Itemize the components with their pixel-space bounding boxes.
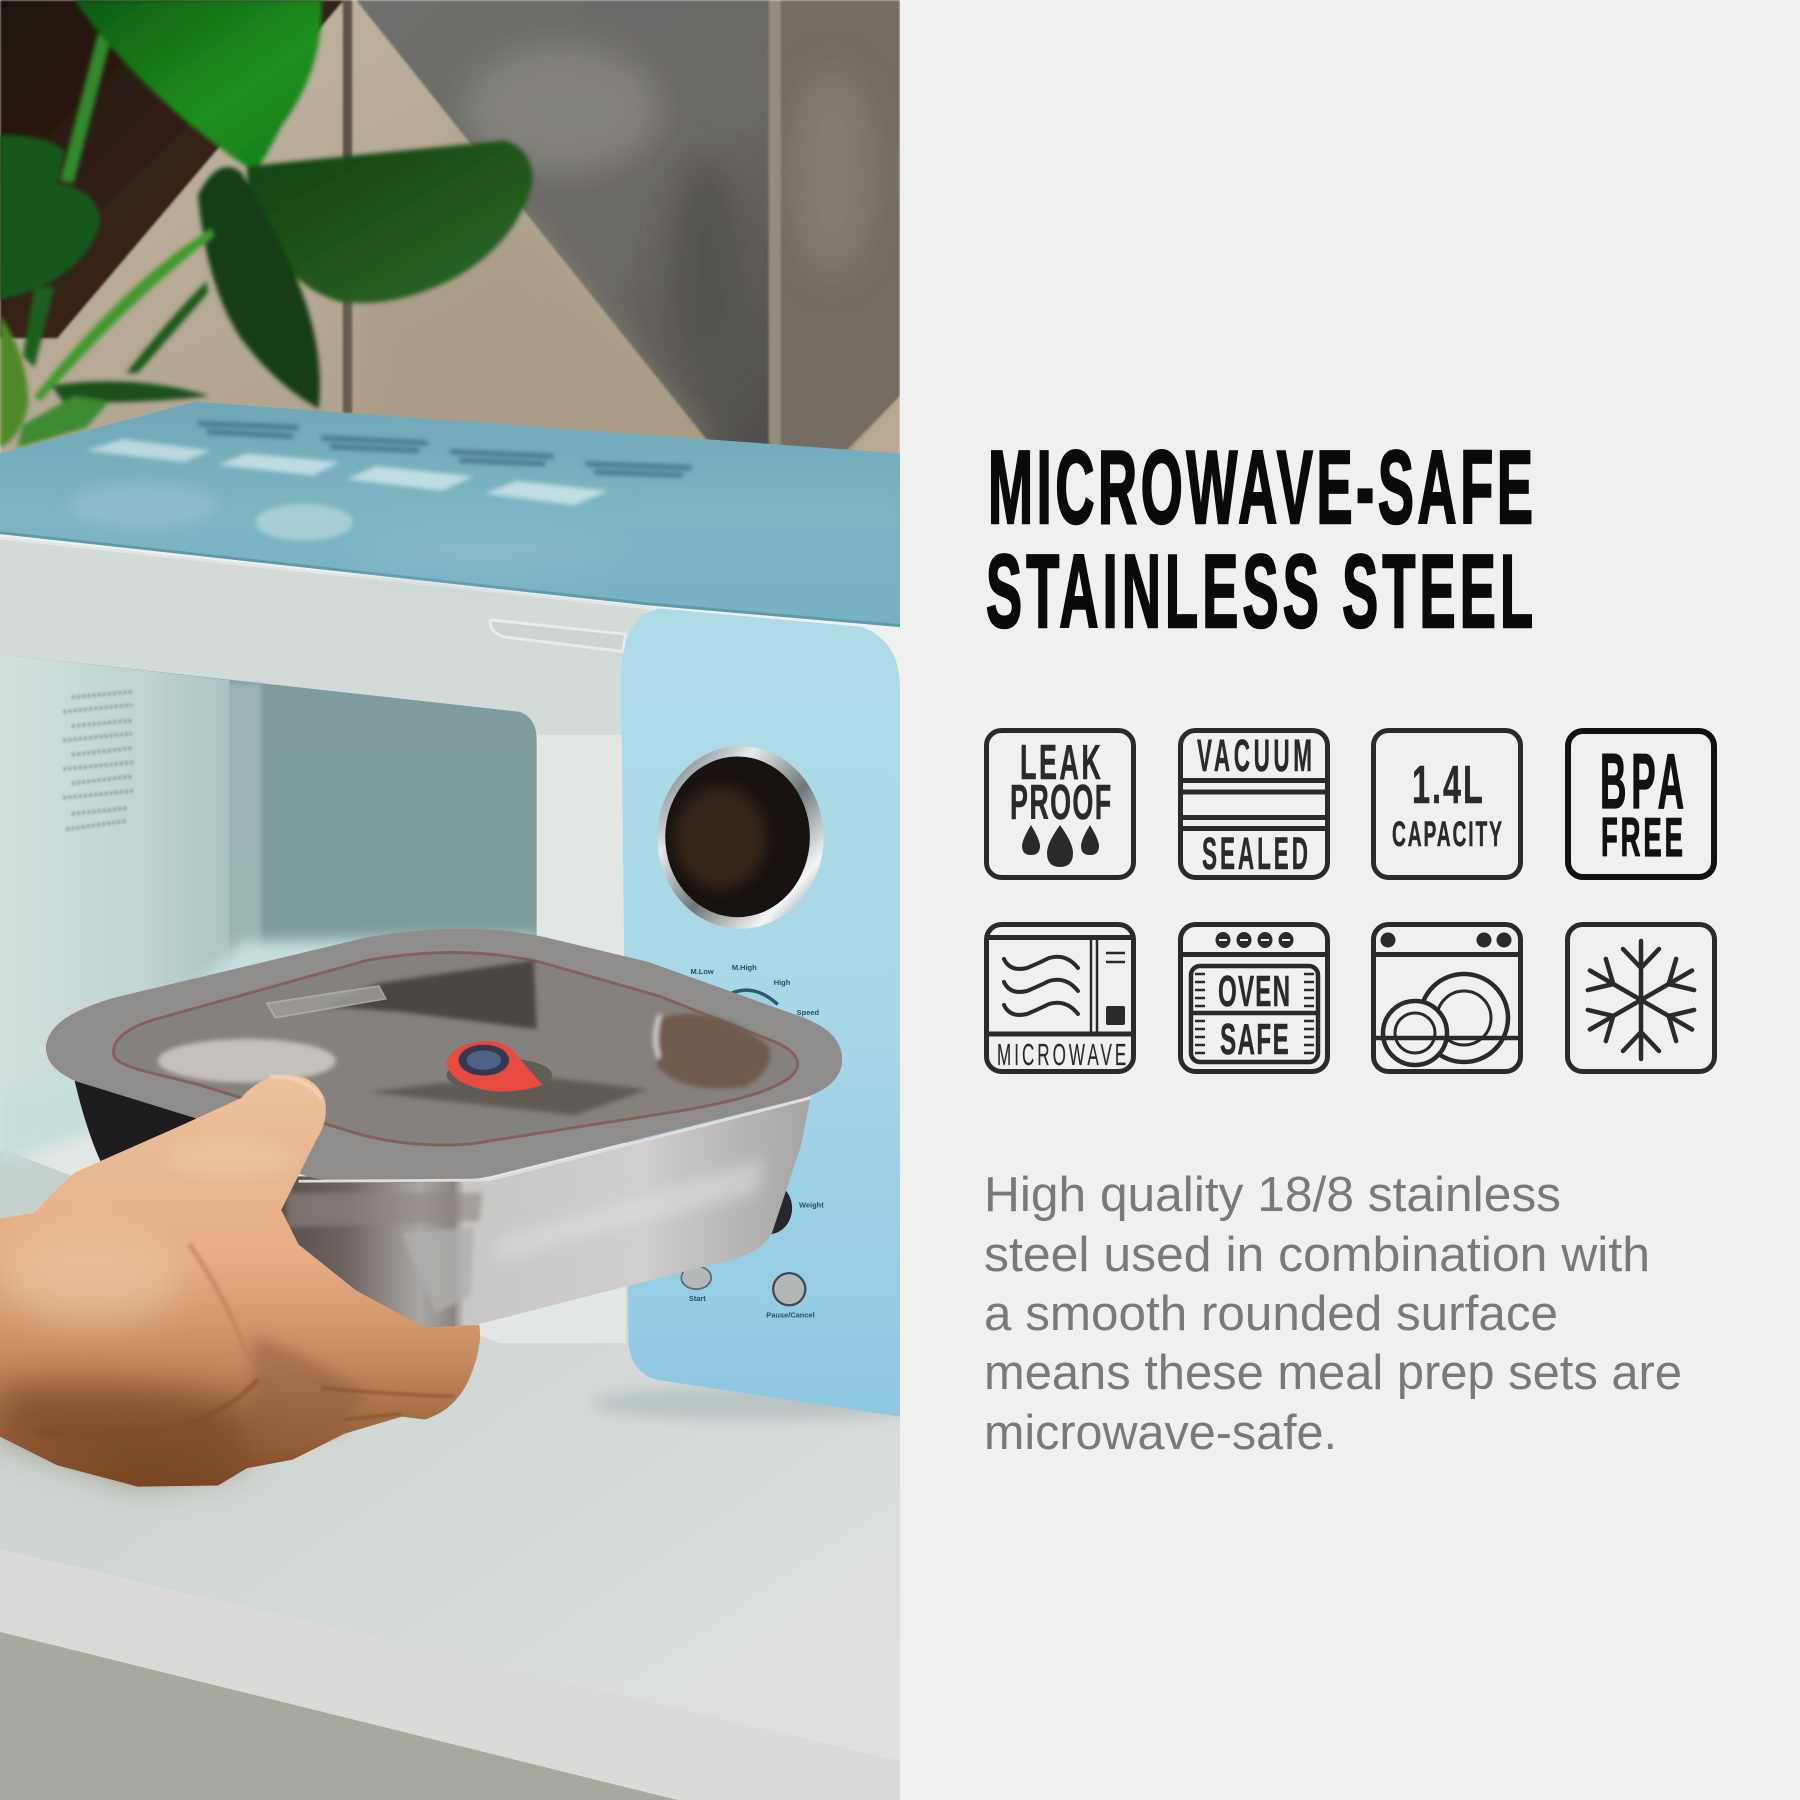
skin shading bbox=[0, 1138, 367, 1483]
icon: microwave: MICROWAVE bbox=[997, 1038, 1126, 1072]
lid brand plate bbox=[267, 986, 386, 1018]
icon: oven safe: OVEN bbox=[1218, 966, 1290, 1016]
panel labels: M.High bbox=[732, 963, 757, 972]
oven interior bbox=[0, 654, 540, 1165]
panel labels: Pause/Cancel bbox=[766, 1310, 815, 1319]
lower control knob bbox=[771, 1190, 792, 1234]
start button bbox=[681, 1266, 711, 1289]
icon: freezer snowflake bbox=[1568, 924, 1714, 1072]
knuckle creases and veins bbox=[188, 1243, 454, 1422]
icon grid bbox=[986, 730, 1714, 1072]
panel labels: Weight bbox=[799, 1201, 824, 1210]
upper control knob bbox=[715, 990, 778, 1004]
icon: 1.4L capacity: CAPACITY bbox=[1392, 814, 1502, 853]
heading: MICROWAVE-SAFE bbox=[988, 429, 1533, 546]
pause button bbox=[773, 1273, 805, 1305]
stainless steel container bbox=[0, 929, 842, 1487]
body text bbox=[984, 1168, 1682, 1460]
vent valve bbox=[447, 1041, 552, 1092]
photo: hand placing container into blue microwave bbox=[0, 0, 936, 1800]
icon: vacuum sealed bbox=[1180, 730, 1328, 879]
icon: microwave bbox=[986, 924, 1134, 1072]
panel labels: Start bbox=[689, 1294, 706, 1303]
icon: 1.4L capacity: 1.4L bbox=[1412, 756, 1483, 815]
icon: leak proof: PROOF bbox=[1010, 776, 1111, 830]
front rim bbox=[298, 1098, 810, 1181]
icon: BPA free: BPA bbox=[1600, 738, 1684, 825]
icon: leak proof bbox=[986, 730, 1134, 878]
door notch bbox=[490, 620, 626, 651]
panel labels: Speed bbox=[797, 1008, 819, 1017]
icon: oven safe bbox=[1180, 924, 1328, 1072]
container dark side bbox=[75, 1081, 198, 1161]
icon: dishwasher bbox=[1374, 924, 1520, 1072]
front frame bbox=[0, 537, 654, 1343]
heading: STAINLESS STEEL bbox=[986, 533, 1533, 650]
heading bbox=[986, 429, 1533, 650]
microwave feet bbox=[499, 1286, 626, 1343]
body text: means these meal prep sets are bbox=[984, 1346, 1682, 1400]
container steel body bbox=[253, 1098, 810, 1331]
food seen through lid bbox=[158, 960, 770, 1115]
hand bbox=[0, 1075, 480, 1487]
dial window bbox=[657, 746, 824, 929]
body text: microwave-safe. bbox=[984, 1406, 1337, 1460]
icon: leak proof: LEAK bbox=[1020, 736, 1101, 790]
icon: 1.4L capacity bbox=[1374, 730, 1520, 878]
panel labels: High bbox=[774, 978, 791, 987]
speaker holes bbox=[63, 692, 133, 829]
lid bbox=[46, 929, 842, 1183]
body text: a smooth rounded surface bbox=[984, 1287, 1558, 1341]
counter top and front edge bbox=[0, 1148, 936, 1800]
body text: High quality 18/8 stainless bbox=[984, 1168, 1561, 1222]
microwave body bbox=[0, 402, 936, 1800]
panel labels bbox=[689, 963, 824, 1319]
icon: BPA free: FREE bbox=[1601, 808, 1683, 869]
plant leaves bbox=[0, 0, 533, 448]
blue control panel bbox=[621, 608, 900, 1417]
icon: BPA free bbox=[1568, 731, 1714, 877]
thumb nail bbox=[270, 1077, 321, 1098]
steel highlights bbox=[287, 1158, 763, 1313]
panel labels: M.Low bbox=[690, 967, 714, 976]
icon: vacuum sealed: VACUUM bbox=[1197, 731, 1312, 781]
tiled wall bbox=[0, 0, 900, 471]
icon: vacuum sealed: SEALED bbox=[1202, 829, 1308, 879]
body text: steel used in combination with bbox=[984, 1228, 1650, 1282]
icon: oven safe: SAFE bbox=[1220, 1014, 1289, 1064]
microwave top with vents bbox=[0, 402, 900, 627]
